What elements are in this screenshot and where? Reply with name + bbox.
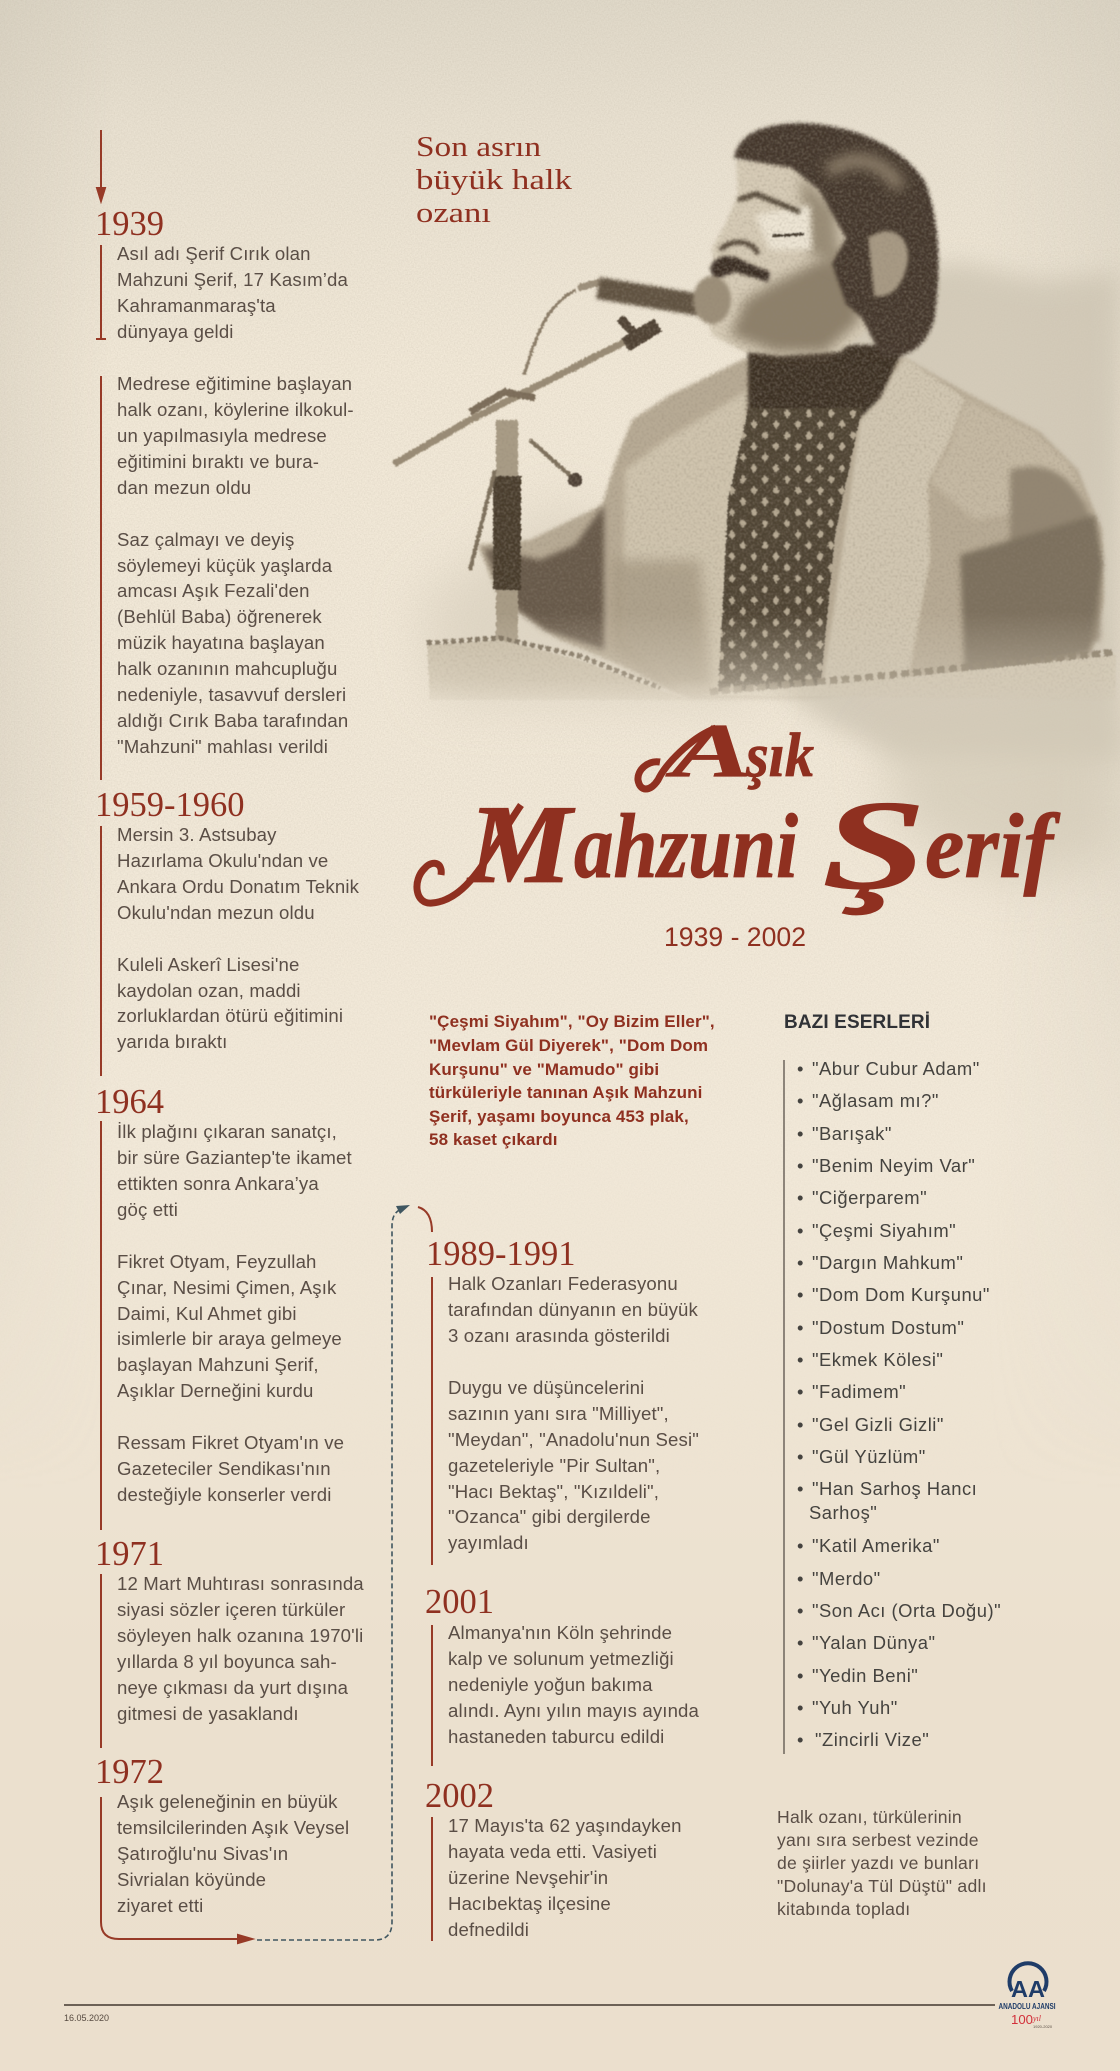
1964 entry: başlayan Mahzuni Şerif, — [117, 1354, 319, 1375]
1972 entry: temsilcilerinden Aşık Veysel — [117, 1817, 349, 1838]
1989-1991 entry: 3 ozanı arasında gösterildi — [448, 1325, 670, 1346]
main title: Aşık Mahzuni Şerif: M — [466, 783, 576, 907]
2002 entry: Hacıbektaş ilçesine — [448, 1893, 611, 1914]
1971 entry: yıllarda 8 yıl boyunca sah- — [117, 1651, 337, 1672]
1964 entry: Fikret Otyam, Feyzullah — [117, 1251, 317, 1272]
1971 entry: siyasi sözler içeren türküler — [117, 1599, 345, 1620]
2001 entry: hastaneden taburcu edildi — [448, 1726, 664, 1747]
list of works — [797, 1058, 1001, 1750]
logo: Anadolu Ajansi: yıl — [1032, 2014, 1042, 2023]
list of works: • — [797, 1349, 804, 1370]
1972 entry: ziyaret etti — [117, 1895, 203, 1916]
1959-1960 entry: Kuleli Askerî Lisesi'ne — [117, 954, 299, 975]
intro paragraph: Kurşunu" ve "Mamudo" gibi — [429, 1060, 659, 1079]
list of works: "Yedin Beni" — [812, 1665, 918, 1686]
list heading: BAZI ESERLERİ — [784, 1012, 930, 1033]
1972 entry: Şatıroğlu'nu Sivas'ın — [117, 1843, 288, 1864]
list of works: "Yuh Yuh" — [812, 1697, 898, 1718]
1989-1991 entry: yayımladı — [448, 1532, 529, 1553]
logo: Anadolu Ajansi — [998, 1963, 1056, 2029]
list of works: "Fadimem" — [812, 1381, 906, 1402]
list of works: • — [797, 1252, 804, 1273]
1989-1991 entry: Halk Ozanları Federasyonu — [448, 1273, 678, 1294]
hair highlight — [828, 161, 900, 188]
1939 entry: müzik hayatına başlayan — [117, 632, 325, 653]
logo: Anadolu Ajansi: AA — [1011, 1976, 1045, 2002]
nose — [720, 242, 758, 254]
cheek highlight — [755, 205, 812, 250]
main title: Aşık Mahzuni Şerif — [417, 709, 1061, 916]
life dates: 1939 - 2002 — [664, 922, 806, 952]
timeline: left rails and arrow — [96, 130, 432, 1943]
closing note: yanı sıra serbest vezinde — [777, 1830, 979, 1850]
logo: Anadolu Ajansi: 100 — [1011, 2012, 1033, 2027]
list of works: • — [797, 1058, 804, 1079]
1964 entry: 1964 — [95, 1083, 164, 1121]
list of works: "Katil Amerika" — [812, 1535, 940, 1556]
list of works: "Dom Dom Kurşunu" — [812, 1284, 990, 1305]
eye and brow — [738, 194, 800, 212]
list of works: • — [797, 1317, 804, 1338]
1989-1991 entry: "Hacı Bektaş", "Kızıldeli", — [448, 1481, 659, 1502]
1972 entry: Sivrialan köyünde — [117, 1869, 266, 1890]
1939 entry: halk ozanı, köylerine ilkokul- — [117, 399, 354, 420]
1939 entry: 1939 — [95, 205, 164, 243]
1964 entry: göç etti — [117, 1199, 178, 1220]
list of works: • — [797, 1284, 804, 1305]
1939 entry: Asıl adı Şerif Cırık olan — [117, 243, 311, 264]
list of works: "Benim Neyim Var" — [812, 1155, 975, 1176]
list of works: • — [797, 1220, 804, 1241]
2001 entry: nedeniyle yoğun bakıma — [448, 1674, 653, 1695]
1959-1960 entry: Ankara Ordu Donatım Teknik — [117, 876, 360, 897]
hair — [734, 123, 938, 358]
neck — [748, 345, 905, 418]
closing note: de şiirler yazdı ve bunları — [777, 1853, 979, 1873]
1972 entry — [95, 1753, 349, 1916]
2001 entry: Almanya'nın Köln şehrinde — [448, 1622, 672, 1643]
1964 entry: Çınar, Nesimi Çimen, Aşık — [117, 1277, 337, 1298]
1939 entry: dan mezun oldu — [117, 477, 251, 498]
1939 entry: Mahzuni Şerif, 17 Kasım’da — [117, 269, 349, 290]
1959-1960 entry — [95, 786, 360, 1052]
main title: Aşık Mahzuni Şerif: erif — [925, 795, 1061, 897]
1964 entry: bir süre Gaziantep'te ikamet — [117, 1147, 353, 1168]
2001 entry — [425, 1583, 700, 1747]
tagline: ozanı — [416, 197, 491, 229]
lower face shadow — [730, 245, 860, 352]
2002 entry: defnedildi — [448, 1919, 529, 1940]
main title: Aşık Mahzuni Şerif: ahzuni — [574, 795, 798, 897]
1959-1960 entry: kaydolan ozan, maddi — [117, 980, 301, 1001]
list of works: "Çeşmi Siyahım" — [812, 1220, 956, 1241]
main title: Aşık Mahzuni Şerif: şık — [745, 722, 814, 790]
1964 entry: ettikten sonra Ankara’ya — [117, 1173, 319, 1194]
list of works: • — [797, 1123, 804, 1144]
list of works: • — [797, 1381, 804, 1402]
list of works: • — [797, 1414, 804, 1435]
1939 entry: (Behlül Baba) öğrenerek — [117, 606, 322, 627]
face — [706, 160, 880, 356]
1989-1991 entry: gazeteleriyle "Pir Sultan", — [448, 1455, 660, 1476]
list of works: "Gel Gizli Gizli" — [812, 1414, 944, 1435]
list of works: "Ağlasam mı?" — [812, 1090, 939, 1111]
list of works: • — [797, 1155, 804, 1176]
tagline: Son asrın — [416, 131, 542, 163]
1959-1960 entry: yarıda bıraktı — [117, 1031, 227, 1052]
1989-1991 entry: sazının yanı sıra "Milliyet", — [448, 1403, 669, 1424]
1971 entry: söyleyen halk ozanına 1970'li — [117, 1625, 363, 1646]
right sleeve dark — [1010, 467, 1100, 660]
list of works: "Ciğerparem" — [812, 1187, 927, 1208]
1964 entry — [95, 1083, 353, 1505]
left jacket lights — [622, 390, 748, 690]
1964 entry: isimlerle bir araya gelmeye — [117, 1328, 342, 1349]
cable — [524, 290, 576, 375]
list of works: • — [797, 1600, 804, 1621]
1939 entry: un yapılmasıyla medrese — [117, 425, 327, 446]
1989-1991 entry: 1989-1991 — [426, 1235, 576, 1273]
list of works: • — [797, 1446, 804, 1467]
list of works: • — [797, 1632, 804, 1653]
2001 entry: kalp ve solunum yetmezliği — [448, 1648, 674, 1669]
1939 entry: halk ozanının mahcupluğu — [117, 658, 337, 679]
1939 entry: Medrese eğitimine başlayan — [117, 373, 352, 394]
logo: Anadolu Ajansi: ANADOLU AJANSI — [998, 2001, 1056, 2011]
1964 entry: Gazeteciler Sendikası'nın — [117, 1458, 331, 1479]
1959-1960 entry: Okulu'ndan mezun oldu — [117, 902, 315, 923]
1939 entry: dünyaya geldi — [117, 321, 234, 342]
intro paragraph: türküleriyle tanınan Aşık Mahzuni — [429, 1083, 702, 1102]
2002 entry — [425, 1777, 682, 1940]
1989-1991 entry: "Ozanca" gibi dergilerde — [448, 1506, 651, 1527]
1959-1960 entry: Mersin 3. Astsubay — [117, 824, 277, 845]
1989-1991 entry: tarafından dünyanın en büyük — [448, 1299, 699, 1320]
closing note: "Dolunay'a Tül Düştü" adlı — [777, 1876, 987, 1896]
saz instrument — [427, 640, 690, 700]
background: aged paper — [0, 0, 1120, 1278]
boom — [394, 325, 658, 464]
1964 entry: Daimi, Kul Ahmet gibi — [117, 1303, 297, 1324]
1939 entry: eğitimini bıraktı ve bura- — [117, 451, 319, 472]
1972 entry: 1972 — [95, 1753, 164, 1791]
2002 entry: 2002 — [425, 1777, 494, 1815]
1964 entry: Ressam Fikret Otyam'ın ve — [117, 1432, 344, 1453]
1959-1960 entry: Hazırlama Okulu'ndan ve — [117, 850, 328, 871]
list of works: "Ekmek Kölesi" — [812, 1349, 943, 1370]
1964 entry: İlk plağını çıkaran sanatçı, — [117, 1121, 337, 1142]
patterned shirt — [718, 408, 862, 692]
date: 16.05.2020 — [64, 2013, 109, 2023]
2002 entry: 17 Mayıs'ta 62 yaşındayken — [448, 1815, 682, 1836]
list of works: • — [797, 1187, 804, 1208]
1939 entry — [95, 205, 354, 757]
1959-1960 entry: 1959-1960 — [95, 786, 244, 824]
stand — [496, 420, 518, 700]
list of works: Sarhoş" — [809, 1502, 877, 1523]
1939 entry: söylemeyi küçük yaşlarda — [117, 555, 333, 576]
list rail — [783, 1060, 785, 1754]
1959-1960 entry: zorluklardan ötürü eğitimini — [117, 1005, 343, 1026]
intro paragraph: 58 kaset çıkardı — [429, 1130, 558, 1149]
left sleeve shade — [484, 505, 604, 650]
1971 entry: gitmesi de yasaklandı — [117, 1703, 299, 1724]
1989-1991 entry: Duygu ve düşüncelerini — [448, 1377, 644, 1398]
list of works: "Son Acı (Orta Doğu)" — [812, 1600, 1001, 1621]
dashed connector arrow — [257, 1205, 410, 1940]
1989-1991 entry — [426, 1235, 699, 1553]
2001 entry: alındı. Aynı yılın mayıs ayında — [448, 1700, 700, 1721]
1971 entry: 12 Mart Muhtırası sonrasında — [117, 1573, 364, 1594]
logo: Anadolu Ajansi: 1920-2020 — [1033, 2024, 1053, 2029]
main title: Aşık Mahzuni Şerif: Ş — [822, 774, 926, 916]
1939 entry: Kahramanmaraş'ta — [117, 295, 276, 316]
list of works: "Merdo" — [812, 1568, 881, 1589]
intro paragraph — [429, 1012, 715, 1149]
tagline — [416, 131, 573, 229]
1964 entry: Aşıklar Derneğini kurdu — [117, 1380, 313, 1401]
1989-1991 entry: "Meydan", "Anadolu'nun Sesi" — [448, 1429, 699, 1450]
intro paragraph: "Çeşmi Siyahım", "Oy Bizim Eller", — [429, 1012, 715, 1031]
smoky backdrop behind portrait — [420, 262, 1120, 880]
list of works: • — [797, 1535, 804, 1556]
1939 entry: aldığı Cırık Baba tarafından — [117, 710, 348, 731]
right lapel — [822, 358, 965, 692]
1939 entry: nedeniyle, tasavvuf dersleri — [117, 684, 346, 705]
microphone — [578, 282, 600, 288]
list of works: "Dostum Dostum" — [812, 1317, 964, 1338]
1972 entry: Aşık geleneğinin en büyük — [117, 1791, 338, 1812]
list of works: • — [797, 1697, 804, 1718]
intro paragraph: "Mevlam Gül Diyerek", "Dom Dom — [429, 1036, 708, 1055]
1971 entry — [95, 1535, 364, 1724]
1939 entry: amcası Aşık Fezali'den — [117, 580, 310, 601]
list of works: "Abur Cubur Adam" — [812, 1058, 980, 1079]
main title: Aşık Mahzuni Şerif: A — [666, 709, 752, 793]
ear — [868, 231, 908, 297]
1939 entry: "Mahzuni" mahlası verildi — [117, 736, 328, 757]
2002 entry: hayata veda etti. Vasiyeti — [448, 1841, 657, 1862]
intro paragraph: Şerif, yaşamı boyunca 453 plak, — [429, 1107, 689, 1126]
list of works: "Dargın Mahkum" — [812, 1252, 963, 1273]
list of works: "Zincirli Vize" — [815, 1729, 929, 1750]
list of works: • — [797, 1729, 804, 1750]
closing note: Halk ozanı, türkülerinin — [777, 1807, 962, 1827]
list of works: "Yalan Dünya" — [812, 1632, 936, 1653]
2002 entry: üzerine Nevşehir'in — [448, 1867, 608, 1888]
1971 entry: 1971 — [95, 1535, 164, 1573]
1964 entry: desteğiyle konserler verdi — [117, 1484, 331, 1505]
list of works: "Han Sarhoş Hancı — [812, 1478, 977, 1499]
shoulder — [930, 398, 1085, 520]
list of works: • — [797, 1665, 804, 1686]
tagline: büyük halk — [416, 164, 573, 196]
1939 entry: Saz çalmayı ve deyiş — [117, 529, 294, 550]
footer rule — [64, 2004, 995, 2006]
list of works: "Barışak" — [812, 1123, 892, 1144]
closing note — [777, 1807, 987, 1919]
list of works: • — [797, 1090, 804, 1111]
list of works: "Gül Yüzlüm" — [812, 1446, 926, 1467]
jacket body — [478, 358, 1104, 700]
1971 entry: neye çıkması da yurt dışına — [117, 1677, 349, 1698]
closing note: kitabında topladı — [777, 1899, 910, 1919]
list of works: • — [797, 1568, 804, 1589]
moustache — [710, 256, 770, 282]
list of works: • — [797, 1478, 804, 1499]
2001 entry: 2001 — [425, 1583, 494, 1621]
portrait: singer at microphone — [394, 123, 1116, 700]
